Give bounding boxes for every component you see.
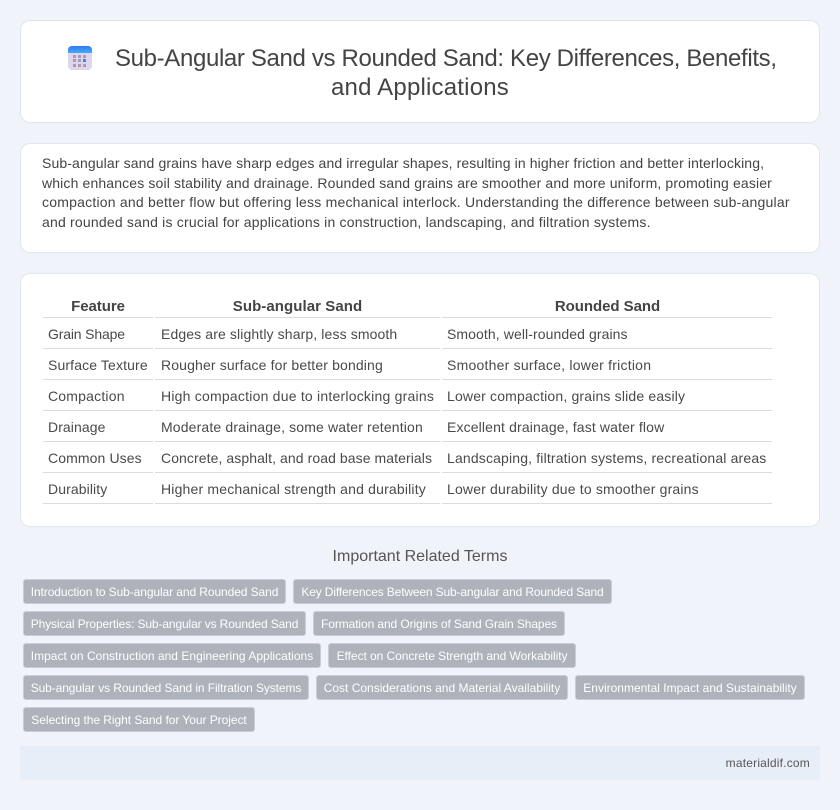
text block: intro paragraph: compaction and better flow but offering less mechanical interlock. Understanding the difference between sub-angular xyxy=(42,194,790,210)
comparison table: Edges are slightly sharp, less smooth xyxy=(161,326,397,342)
comparison table: Lower compaction, grains slide easily xyxy=(447,388,685,404)
comparison table: Concrete, asphalt, and road base materials xyxy=(161,450,432,466)
text block: intro paragraph: and rounded sand is crucial for applications in construction, landscaping, and filtration systems. xyxy=(42,214,651,230)
panel: comparison table card xyxy=(20,273,820,527)
comparison table: Feature xyxy=(71,298,125,315)
tag list: related terms: Formation and Origins of Sand Grain Shapes xyxy=(321,617,557,631)
tag list: related terms: Sub-angular vs Rounded Sand in Filtration Systems xyxy=(31,681,301,695)
title: Sub-Angular Sand vs Rounded Sand: Key Differences, Benefits, xyxy=(115,45,777,72)
tag list: related terms xyxy=(23,579,805,732)
text block: intro paragraph: which enhances soil stability and drainage. Rounded sand grains are smoother and more uniform, promoting easier xyxy=(42,175,772,191)
footer source text: materialdif.com xyxy=(726,756,810,770)
comparison table: Sub-angular Sand xyxy=(233,298,362,315)
text block: intro paragraph xyxy=(42,155,790,230)
icon: calendar xyxy=(68,46,92,70)
comparison table: Rounded Sand xyxy=(555,298,660,315)
comparison table: Landscaping, filtration systems, recreational areas xyxy=(447,450,766,466)
panel: title card xyxy=(20,20,820,123)
comparison table: Lower durability due to smoother grains xyxy=(447,481,699,497)
panel: intro text card xyxy=(20,143,820,253)
comparison table: Compaction xyxy=(48,388,125,404)
tag list: related terms: Physical Properties: Sub-angular vs Rounded Sand xyxy=(31,617,298,631)
tag list: related terms: Introduction to Sub-angular and Rounded Sand xyxy=(31,585,278,599)
comparison table: Smooth, well-rounded grains xyxy=(447,326,628,342)
comparison table: Smoother surface, lower friction xyxy=(447,357,651,373)
comparison table xyxy=(43,298,772,504)
comparison table: Higher mechanical strength and durability xyxy=(161,481,426,497)
comparison table: Surface Texture xyxy=(48,357,148,373)
tag list: related terms: Cost Considerations and Material Availability xyxy=(324,681,560,695)
comparison table: Grain Shape xyxy=(48,326,125,342)
comparison table: Durability xyxy=(48,481,107,497)
comparison table: Rougher surface for better bonding xyxy=(161,357,383,373)
text block: intro paragraph: Sub-angular sand grains have sharp edges and irregular shapes, resulting in higher friction and better interlocking, xyxy=(42,155,764,171)
comparison table: Excellent drainage, fast water flow xyxy=(447,419,664,435)
comparison table: High compaction due to interlocking grains xyxy=(161,388,434,404)
tag list: related terms: Environmental Impact and Sustainability xyxy=(583,681,797,695)
tag list: related terms: Selecting the Right Sand for Your Project xyxy=(31,713,247,727)
title xyxy=(115,45,777,101)
title: and Applications xyxy=(331,74,509,101)
comparison table: Moderate drainage, some water retention xyxy=(161,419,423,435)
footer bar xyxy=(20,746,820,780)
comparison table: Common Uses xyxy=(48,450,142,466)
comparison table: Drainage xyxy=(48,419,105,435)
tag list: related terms: Key Differences Between Sub-angular and Rounded Sand xyxy=(301,585,604,599)
heading: related terms: Important Related Terms xyxy=(333,548,507,565)
tag list: related terms: Effect on Concrete Strength and Workability xyxy=(337,649,567,663)
tag list: related terms: Impact on Construction and Engineering Applications xyxy=(31,649,313,663)
